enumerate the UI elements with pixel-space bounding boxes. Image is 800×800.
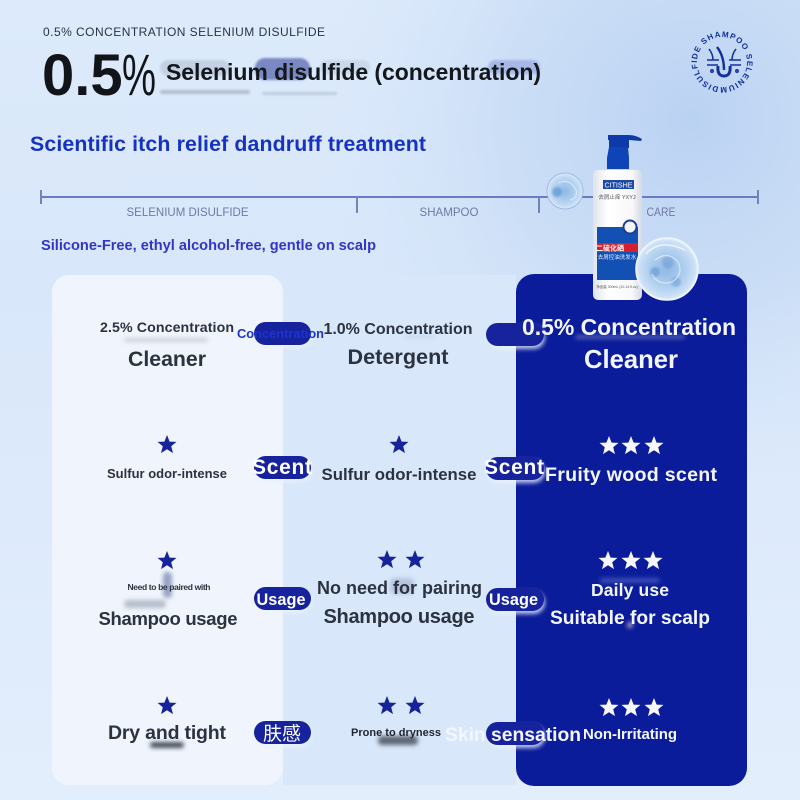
headline number: % (122, 43, 156, 108)
row 1: mid concentration: 1.0% Concentration (324, 321, 472, 338)
header label: concentration: 0.5% CONCENTRATION SELENIUM DISULFIDE (43, 25, 325, 39)
scale label: shampoo: SHAMPOO (420, 205, 478, 219)
row 1: left concentration: Cleaner (128, 347, 206, 371)
row 2: right pill: Scent (484, 456, 544, 479)
row 3: mid text: Shampoo usage (324, 606, 474, 628)
row 2: right stars (600, 436, 664, 454)
row 2: right text: Fruity wood scent (545, 464, 717, 486)
row 1: right concentration: Cleaner (584, 346, 678, 374)
row 3: left pill (254, 587, 311, 610)
row 4: pill label overflow: Skin sensation (445, 725, 581, 746)
row 4: left pill (254, 721, 311, 745)
row 1: right concentration (522, 314, 736, 374)
red band: 二硫化硒 (596, 244, 624, 252)
row 3: mid text: No need for pairing (317, 578, 482, 598)
row 3: left star (158, 551, 176, 569)
bottom text: 净含量 300mL (10.14 fl.oz) (596, 284, 638, 289)
row 4: right pill (486, 722, 544, 745)
row 2: mid star (390, 435, 408, 453)
bottle body (593, 170, 642, 300)
row 1: right pill (486, 323, 544, 346)
row 3: mid text (317, 578, 482, 628)
smudges under column text (124, 335, 685, 748)
scale line with tick marks (41, 190, 758, 213)
panel: left column (52, 275, 283, 785)
row 3: right stars (598, 551, 662, 569)
row 3: right text: Suitable for scalp (550, 608, 710, 629)
row 4: mid text: Prone to dryness (351, 727, 441, 739)
row 4: left text: Dry and tight (108, 722, 226, 744)
headline number: 0.5 (42, 43, 123, 108)
small chinese line: 去屑止痒 YXYJ (598, 193, 636, 201)
small bubble (547, 173, 583, 209)
row 2: left text: Sulfur odor-intense (107, 466, 227, 481)
round logo badge: DISULFIDE SHAMPOO SELENIUM (691, 31, 753, 93)
icon: hair follicle (707, 47, 741, 76)
row 3: right text (550, 580, 710, 629)
row 2: left pill: Scent (252, 456, 312, 479)
row 1: right concentration: 0.5% Concentration (522, 314, 736, 340)
row 4: right text: Non-Irritating (583, 726, 677, 743)
row 3: left text: Shampoo usage (98, 608, 238, 629)
product line: 去屑控油洗发水 (598, 253, 637, 261)
row 3: left pill: Usage (256, 591, 306, 609)
row 3: right text: Daily use (591, 580, 669, 600)
scale label: selenium disulfide: SELENIUM DISULFIDE (126, 205, 248, 219)
row 1: left concentration (100, 320, 234, 371)
smudged header artefacts (160, 58, 540, 95)
headline text: Selenium disulfide (concentration) (166, 59, 541, 85)
feature note: Silicone-Free, ethyl alcohol-free, gentle on scalp (41, 238, 376, 254)
row 3: left text (98, 582, 238, 629)
row 3: mid stars (378, 550, 424, 568)
row 1: mid concentration: Detergent (348, 344, 448, 369)
row 4: mid stars (378, 696, 424, 714)
row 1: mid concentration (324, 321, 472, 369)
row 1: left pill: Concentration (237, 326, 324, 341)
large bubble (636, 238, 698, 300)
brand tag: CITISHE (604, 180, 632, 190)
pump head (608, 135, 642, 148)
pump neck (607, 147, 629, 169)
panel: mid column (283, 275, 516, 785)
product bottle (593, 135, 642, 300)
row 1: left concentration: 2.5% Concentration (100, 320, 234, 336)
row 3: left text: Need to be paired with (128, 582, 210, 592)
row 1: left pill (237, 322, 324, 345)
round seal (624, 220, 636, 234)
row 4: left pill: 肤感 (263, 723, 301, 745)
red band (596, 243, 638, 252)
panel: right column (516, 274, 747, 786)
row 3: right pill: Usage (489, 591, 538, 609)
row 3: right pill (486, 588, 544, 611)
row 2: left star (158, 435, 176, 453)
row 4: right stars (600, 698, 664, 716)
blue label (597, 227, 638, 280)
row 4: left star (158, 696, 176, 714)
scale label: care: CARE (646, 205, 676, 219)
subtitle: Scientific itch relief dandruff treatment (30, 132, 426, 156)
row 2: mid text: Sulfur odor-intense (322, 465, 476, 484)
